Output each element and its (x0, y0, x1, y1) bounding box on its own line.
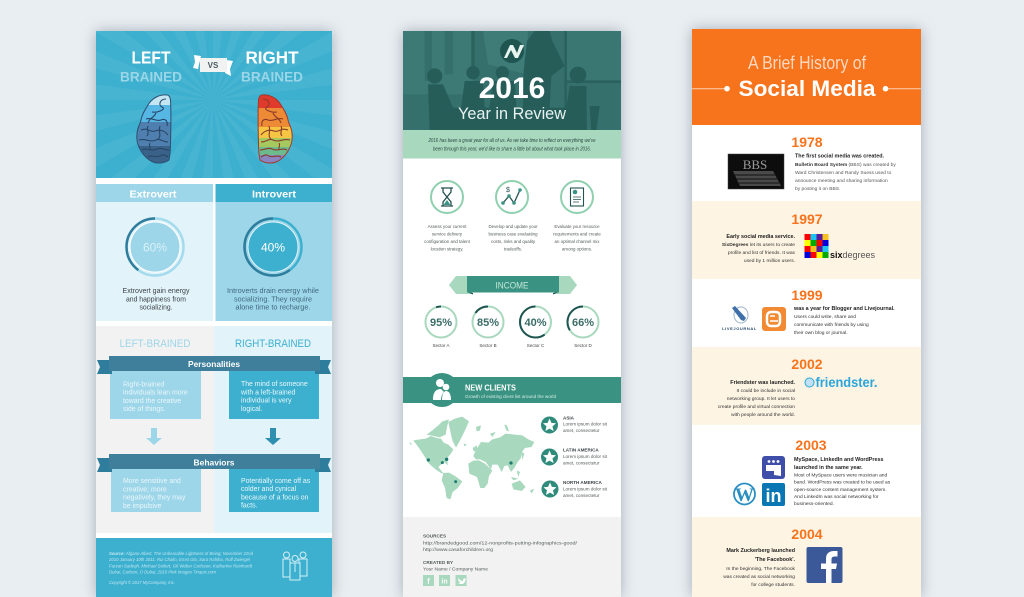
icon: linkedin (762, 483, 785, 506)
panel: introvert (216, 184, 332, 321)
band: new clients (403, 373, 621, 407)
icon: facebook (423, 575, 434, 586)
band: new clients: Growth of existing client list around the world (465, 394, 557, 399)
item: asia: ASIA (563, 416, 575, 420)
text: extrovert description: and happiness from (126, 296, 186, 304)
text: 1978 description: Bulletin Board System (BBS) was created by (795, 162, 896, 168)
text: 2003 description: MySpace, LinkedIn and WordPress (794, 457, 883, 463)
chart: sector D 66%: 66% (572, 317, 594, 329)
item: north america: amet, consectetur (563, 493, 600, 498)
text: develop column: business case evaluating (488, 232, 538, 236)
icon: three people (283, 552, 307, 580)
header: history of social media (692, 29, 921, 125)
icon: line chart: $ (506, 187, 510, 194)
ribbon: income (449, 276, 577, 294)
panel: brained comparison (96, 326, 332, 533)
vs banner (193, 55, 233, 76)
silhouette figures (427, 31, 600, 131)
item: north america: NORTH AMERICA (563, 480, 603, 485)
icon: livejournal (722, 306, 757, 331)
header: year in review (403, 31, 621, 131)
text: 1997 description (722, 234, 796, 264)
text: sources: CREATED BY (423, 560, 454, 565)
text: 1999 description (793, 306, 895, 336)
text: 1997 description: profile and list of friends. It was (728, 250, 796, 256)
box: right personality: individual is very (241, 398, 292, 404)
header: history of social media: A Brief History of (748, 52, 867, 73)
icon: line chart (496, 181, 528, 213)
icon: facebook: f (427, 577, 430, 586)
chart: world map (409, 417, 534, 499)
text: source credits: 2010 January 10th 2011. Rui Chalin, Ernst Ola, Sara Rahiha, Rolf Zwiergel (108, 557, 251, 562)
box: right behaviors: because of a focus on (241, 494, 309, 502)
text: 2004 description: In the beginning, The Facebook (726, 566, 796, 572)
box: left behaviors: be impulsive (123, 503, 161, 510)
icon: blue brain (135, 93, 173, 165)
box: left behaviors: More sensitive and (123, 478, 181, 485)
item: asia (541, 416, 608, 434)
box: right behaviors: colder and cynical (241, 486, 297, 493)
text: sources: http://www.casaforchildren.org (423, 547, 493, 552)
section: 2004: 2004 (791, 526, 823, 542)
chart: 40% ring: 40% (261, 240, 285, 254)
chart: sector B 85% (472, 306, 504, 348)
text: 2002 description (718, 380, 795, 418)
box: left personality (110, 371, 201, 419)
band: new clients: NEW CLIENTS (465, 384, 516, 392)
text: source credits: Copyright © 2017 MyCompany, Inc. (109, 579, 175, 585)
vs banner: VS (208, 61, 219, 70)
item: north america: Lorem ipsum dolor sit (563, 486, 608, 492)
text: assess column: location strategy. (431, 246, 463, 252)
item: latin america: Lorem ipsum dolor sit (563, 454, 608, 459)
icon: hourglass (431, 181, 463, 213)
heading: right brained: RIGHT (246, 48, 299, 68)
arrow: right down (265, 428, 281, 445)
panel: brief history of social media infographic (692, 29, 921, 597)
text: develop column (488, 224, 538, 252)
icon: document (561, 181, 593, 213)
heading: right brained (241, 48, 303, 84)
section: 1978: 1978 (791, 134, 823, 150)
text: 1997 description: used by 1 million users. (744, 258, 795, 264)
text: develop column: Develop and update your (488, 224, 538, 229)
text: 2004 description (723, 548, 796, 588)
text: 1978 description (795, 154, 896, 192)
footer: sources (96, 538, 332, 597)
section: 1997 (692, 201, 921, 279)
icon: linkedin: in (766, 486, 782, 506)
header: left vs right brained (96, 31, 332, 178)
text: 2002 description: with people around the world. (731, 412, 795, 418)
ribbon: personalities: Personalities (188, 359, 240, 369)
text: introvert description: socializing. They require (234, 296, 312, 304)
image: BBS logo: BBS (743, 157, 767, 172)
section: 2004 (692, 517, 921, 597)
text: evaluate column: an optimal channel mix (555, 239, 600, 244)
text: source credits: Source: Afgano Albert. The Unbearable Lightness of Being; November 22nd (109, 551, 253, 556)
box: right behaviors: facts. (241, 502, 258, 510)
text: 2003 description: And LinkedIn was social networking for (794, 494, 879, 500)
box: left behaviors: negatively, they may (123, 494, 186, 502)
text: assess column: configuration and talent (424, 239, 471, 244)
image: sixdegrees logo: sixdegrees (830, 250, 876, 260)
text: 1999 description: Users could write, share and (794, 314, 856, 320)
section: 2002 (692, 347, 921, 425)
box: right behaviors (229, 469, 319, 512)
icon: myspace (762, 456, 785, 479)
image: BBS logo (728, 154, 784, 189)
ribbon: behaviors (97, 454, 331, 472)
text: 2004 description: for college students. (751, 582, 795, 588)
text: 2003 description (794, 457, 891, 507)
text: sources: SOURCES (423, 534, 446, 538)
subtitle: year in review: Year in Review (458, 105, 566, 123)
text: 2002 description: networking group. It let users to (727, 396, 795, 402)
heading: left brained: LEFT (132, 48, 171, 68)
text: assess column: service delivery (432, 232, 463, 236)
panel: extrovert: Extrovert (130, 190, 177, 200)
intro band: been through this year, we'd like to share a little bit about what took place in 2016. (433, 146, 591, 152)
item: latin america: amet, consectetur (563, 460, 600, 466)
box: right personality: logical. (241, 406, 263, 413)
panel: 2016 year in review infographic (403, 31, 621, 597)
text: introvert description: alone time to recharge. (236, 304, 311, 312)
text: 2003 description: launched in the same year. (794, 465, 863, 471)
item: asia: Lorem ipsum dolor sit (563, 422, 608, 426)
box: left personality: side of things. (123, 406, 166, 413)
text: 2003 description: Most of MySpace users were musician and (794, 472, 888, 478)
icon: blogger (762, 307, 786, 331)
heading: left brained: BRAINED (120, 68, 182, 84)
text: assess column (424, 224, 471, 252)
section: 1978 (728, 134, 896, 192)
section: 1997: 1997 (791, 211, 823, 227)
chart: sector C 40% (520, 306, 551, 348)
icon: linkedin: in (441, 578, 448, 586)
image: sixdegrees logo (804, 234, 876, 260)
icon: livejournal: LIVEJOURNAL (722, 326, 757, 331)
section: 1999 (722, 287, 895, 336)
text: 2003 description: open-source content management system. (794, 487, 887, 493)
icon: facebook (806, 547, 842, 583)
box: left personality: Right-brained (123, 382, 165, 388)
box: right personality: with a left-brained (240, 390, 296, 396)
text: sources: Your Name / Company Name (423, 566, 488, 572)
ribbon: behaviors: Behaviors (194, 458, 235, 468)
text: 1997 description: SixDegrees let its users to create (722, 242, 795, 248)
text: extrovert description: socializing. (140, 304, 173, 312)
icon: wordpress: W (735, 485, 754, 506)
item: north america (542, 480, 608, 498)
text: 1978 description: Ward Christensen and Randy Suess used to (795, 170, 892, 176)
box: right personality: The mind of someone (241, 381, 308, 388)
text: extrovert description: Extrovert gain energy (122, 288, 190, 295)
section: 2002: 2002 (791, 356, 823, 372)
intro band: 2016 has been a great year for all of us. As we take time to reflect on everything we've (428, 138, 596, 144)
icon: clients (433, 379, 451, 400)
text: source credits (108, 551, 253, 585)
chart: sector D 66%: Sector D (574, 343, 592, 348)
text: 1978 description: by posting it on BBS. (795, 186, 840, 192)
intro band (403, 130, 621, 158)
footer: sources and credits (403, 517, 621, 597)
icon: rainbow brain (258, 94, 293, 164)
text: 2002 description: Friendster was launched. (730, 380, 795, 386)
photo: meeting silhouettes (403, 31, 621, 131)
chart: sector A 95%: Sector A (432, 343, 450, 348)
text: 1999 description: their own blog or journal. (794, 330, 848, 336)
text: sources: http://brandedgood.com/12-nonprofits-putting-infographics-good/ (423, 540, 578, 546)
item: latin america: LATIN AMERICA (563, 448, 599, 452)
section: 2003: 2003 (795, 437, 827, 453)
heading: left brained (120, 48, 182, 84)
chart: 60% ring: 60% (143, 240, 167, 254)
chart: sector C 40%: 40% (524, 317, 547, 329)
section: 2003 (734, 437, 891, 507)
box: left behaviors (111, 469, 201, 512)
text: introvert description: Introverts drain energy while (227, 288, 319, 295)
heading: right brained: BRAINED (241, 68, 303, 84)
text: 1978 description: The first social media was created. (795, 154, 884, 160)
header: history of social media: Social Media (738, 76, 876, 101)
text: introvert description (227, 288, 319, 312)
box: right personality (229, 371, 319, 419)
text: 1999 description: was a year for Blogger and Livejournal. (793, 306, 895, 312)
ribbon: personalities (97, 356, 331, 374)
text: extrovert description (122, 288, 190, 312)
box: left personality: individuals lean more (123, 390, 188, 396)
heading: right-brained: RIGHT-BRAINED (235, 338, 311, 350)
text: source credits: Dubai, Carlson, O Dubai, 2010 Pink Images Tinapix.com (109, 570, 216, 574)
arrow: left down (146, 428, 162, 445)
chart: sector A 95% (426, 306, 456, 348)
text: 2004 description: Mark Zuckerberg launched (726, 548, 795, 554)
box: left behaviors: creative; more (123, 486, 167, 494)
text: evaluate column (553, 224, 601, 252)
chart: sector D 66% (568, 306, 598, 348)
heading: left-brained: LEFT-BRAINED (120, 338, 191, 350)
text: 1978 description: announce meeting and sharing information (795, 178, 888, 184)
icon: linkedin (439, 575, 450, 586)
text: 1997 description: Early social media service. (726, 234, 795, 240)
text: 2002 description: It could be include in social (737, 388, 795, 394)
chart: sector A 95%: 95% (430, 317, 452, 329)
text: 1999 description: communicate with friends by using (794, 322, 869, 328)
item: asia: amet, consectetur (563, 428, 600, 433)
text: sources (423, 534, 578, 572)
text: 2003 description: band. WordPress was created to be used as (794, 480, 891, 486)
text: 2003 description: business-oriented. (794, 501, 834, 507)
section: 1999: 1999 (791, 287, 823, 303)
text: develop column: tradeoffs. (504, 246, 522, 252)
panel: introvert: Introvert (252, 190, 297, 200)
text: evaluate column: Evaluate your resource (554, 224, 600, 229)
panel: left vs right brained infographic (96, 0, 332, 597)
box: left personality: toward the creative (123, 398, 181, 405)
text: 2004 description: was created as social networking (723, 574, 795, 580)
ribbon: income: INCOME (496, 280, 528, 290)
logo: friendster: friendster. (816, 375, 878, 390)
text: 2004 description: 'The Facebook'. (755, 557, 795, 563)
text: evaluate column: requirements and create (553, 232, 601, 236)
title: 2016: 2016 (479, 72, 545, 105)
icon: twitter (456, 575, 466, 586)
icon: logo N (500, 39, 524, 63)
text: assess column: Assess your current (428, 224, 467, 229)
text: evaluate column: among options. (562, 246, 592, 252)
chart: sector C 40%: Sector C (527, 343, 545, 348)
panel: extrovert (96, 184, 213, 321)
chart: sector B 85%: 85% (477, 317, 499, 329)
text: 2002 description: create profile and virtual connection (718, 404, 795, 410)
text: develop column: costs, risks and quality (491, 239, 536, 244)
item: latin america (541, 448, 608, 466)
chart: sector B 85%: Sector B (479, 343, 497, 348)
text: source credits: Farzan Sadeqh, Michael Seifert, Gil Weber Carlsson, Katharine Reinhardt (109, 564, 253, 568)
box: right behaviors: Potentially come off as (241, 478, 311, 485)
